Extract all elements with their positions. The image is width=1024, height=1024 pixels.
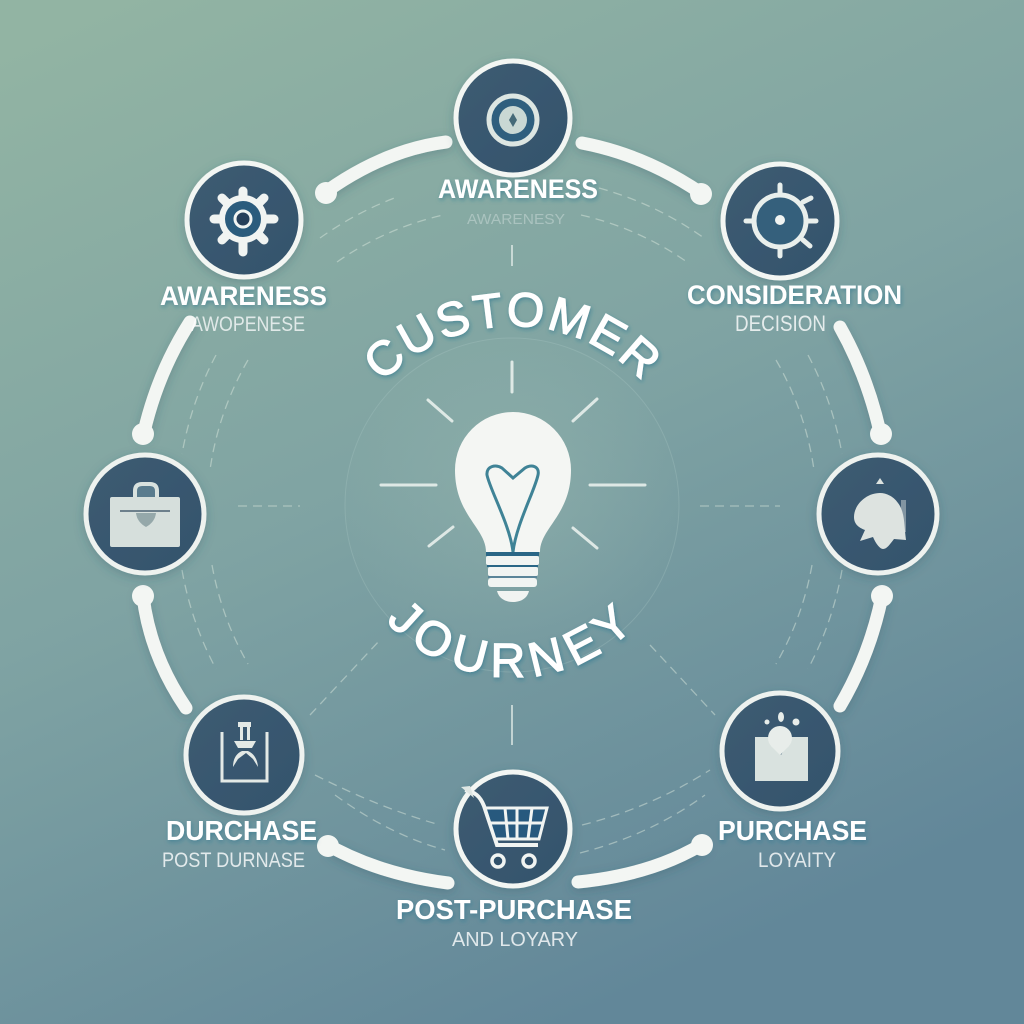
- bulb filament: [487, 466, 538, 552]
- title: journey: JOURNEY: [388, 602, 627, 682]
- label: durchase: POST DURNASE: [162, 849, 305, 872]
- arc end dots: [132, 182, 893, 857]
- icon: shopping cart: [461, 786, 547, 867]
- bulb rays: [381, 362, 645, 548]
- label: post-purchase: POST-PURCHASE: [396, 894, 632, 925]
- icon: lightbulb: [381, 362, 645, 602]
- node: right bell: [819, 455, 937, 573]
- journey ring arcs: [143, 142, 882, 883]
- label: left awareness: [160, 281, 327, 336]
- node: left briefcase: [86, 455, 204, 573]
- label: purchase: LOYAITY: [758, 849, 836, 872]
- node: right-top consideration: [723, 164, 837, 278]
- node: bottom-right purchase: [722, 693, 838, 809]
- icon: dial: [746, 185, 816, 256]
- label: purchase: [718, 815, 867, 872]
- icon: briefcase: [110, 484, 180, 547]
- label: left awareness: AWARENESS: [160, 281, 327, 311]
- label: consideration: CONSIDERATION: [687, 280, 902, 310]
- node: bottom post-purchase: [456, 772, 570, 886]
- label: top awareness: [438, 174, 598, 228]
- label: top awareness: AWARENESS: [438, 174, 598, 204]
- label: consideration: [687, 280, 902, 336]
- icon: gear: [214, 191, 274, 252]
- label: post-purchase: [396, 894, 632, 951]
- short vertical ticks: [511, 245, 513, 745]
- title: customer: CUSTOMER: [366, 292, 662, 383]
- bulb glass: [455, 412, 571, 552]
- label: top awareness: AWARENESY: [467, 211, 565, 228]
- icon: bell: [854, 478, 906, 549]
- label: durchase: DURCHASE: [166, 815, 317, 846]
- icon: product box: [222, 722, 267, 781]
- label: left awareness: AWOPENESE: [191, 313, 305, 336]
- label: purchase: PURCHASE: [718, 815, 867, 846]
- central glow ring: [345, 338, 679, 672]
- node: bottom-left durchase: [186, 697, 302, 813]
- label: durchase: [162, 815, 317, 872]
- icon: target: [489, 96, 537, 144]
- node: left-top awareness: [187, 163, 301, 277]
- node: top awareness: [456, 61, 570, 175]
- label: post-purchase: AND LOYARY: [452, 929, 578, 951]
- icon: envelope with bulb: [755, 712, 808, 781]
- dashed connector lines: [182, 188, 842, 853]
- label: consideration: DECISION: [735, 311, 826, 336]
- bulb base: [486, 552, 539, 602]
